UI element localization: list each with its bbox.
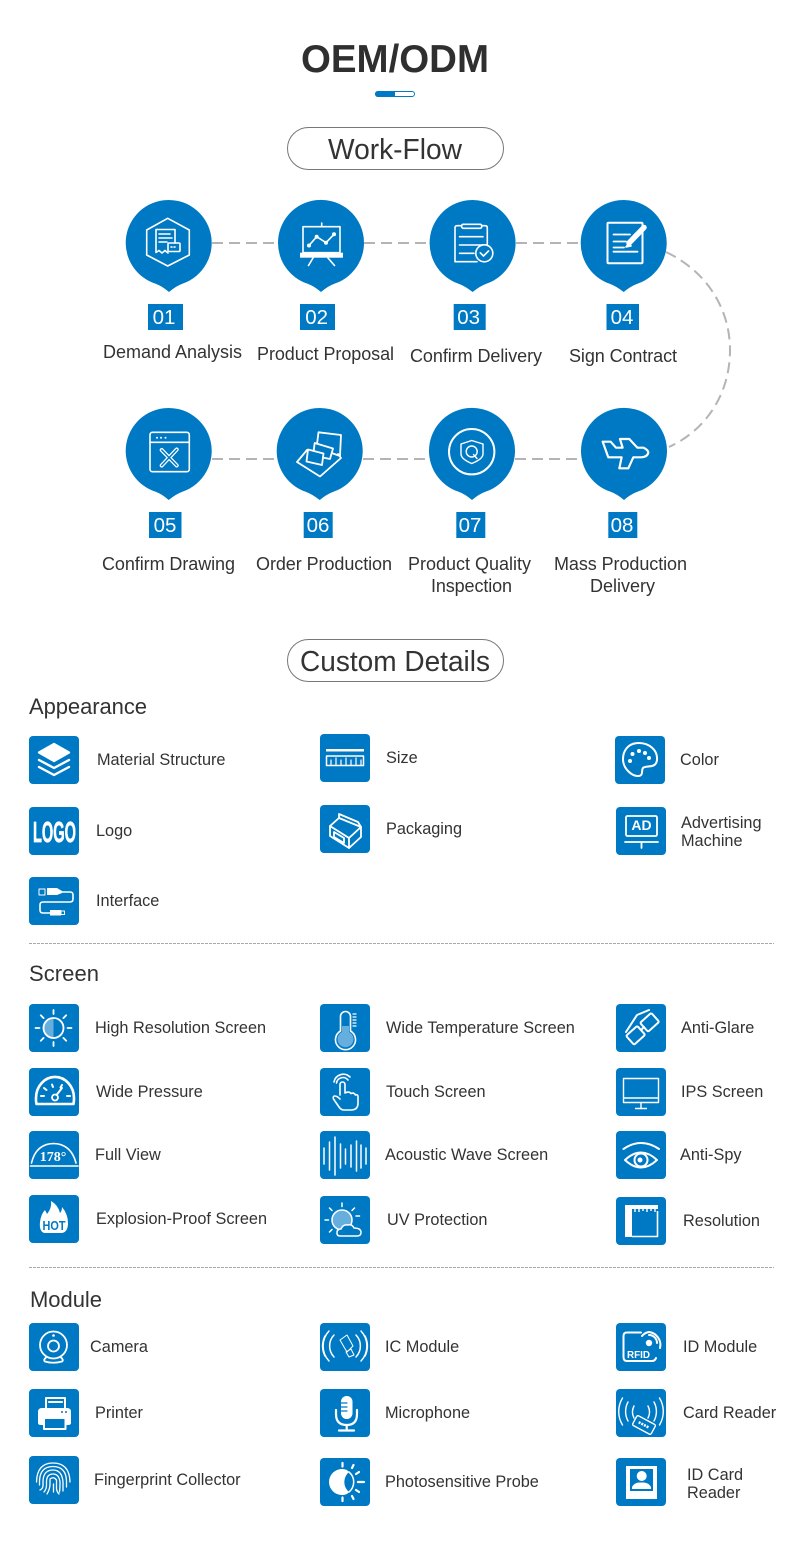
item: Anti-Spy: Anti-Spy [680,1146,742,1164]
marker [277,408,363,500]
label: Inspection [431,576,512,596]
icon: AD screen [625,816,658,848]
item: High Resolution Screen [29,1004,266,1052]
item: Packaging: Packaging [386,820,462,838]
icon: requirements document [147,218,189,266]
item: IPS Screen: IPS Screen [681,1083,763,1101]
item: ID Module: ID Module [683,1338,757,1356]
panel: workflow step 04 [569,200,677,366]
icon: contract with pen [608,223,644,263]
item: Acoustic Wave Screen: Acoustic Wave Screen [385,1146,548,1164]
item: IC Module: IC Module [385,1338,459,1356]
item: High Resolution Screen: High Resolution Screen [95,1019,266,1037]
panel: workflow step 02: 02 [305,306,328,329]
icon: monitor [624,1078,658,1108]
icon: palette [623,743,657,776]
number [149,512,182,538]
title underline bar [375,91,414,97]
marker [278,200,364,292]
icon: touch hand [333,1074,358,1110]
label: Product Proposal [257,344,394,364]
number [608,512,637,538]
item: Color: Color [680,751,719,769]
icon: hot flame [40,1201,68,1233]
item: Packaging [320,805,462,853]
item: Fingerprint Collector: Fingerprint Collector [94,1471,241,1489]
heading: Custom Details [288,640,504,682]
marker [126,408,212,500]
panel: workflow step 08: 08 [611,514,633,537]
item: Microphone: Microphone [385,1404,470,1422]
number [148,304,183,330]
icon: eye [624,1143,659,1168]
item: ID Card Reader: ID Card [687,1466,743,1484]
item: Acoustic Wave Screen [320,1131,548,1179]
panel: workflow step 06 [256,408,392,574]
item: ID Module [616,1323,757,1371]
item: Explosion-Proof Screen: Explosion-Proof Screen [96,1210,267,1228]
number [456,512,485,538]
item: Microphone [320,1389,470,1437]
icon: contactless card [323,1331,367,1361]
number [454,304,486,330]
marker [581,200,667,292]
icon: microphone [336,1396,357,1430]
item: Anti-Glare: Anti-Glare [681,1019,754,1037]
panel: workflow step 07 [408,408,531,596]
item: Touch Screen [320,1068,486,1116]
panel: workflow step 03: 03 [457,306,480,329]
marker [126,200,212,292]
item: Wide Temperature Screen [320,1004,575,1052]
icon: light and dark sun [329,1463,364,1501]
item: Touch Screen: Touch Screen [386,1083,486,1101]
panel: workflow step 04: 04 [611,306,633,329]
panel: workflow step 02 [257,200,394,364]
icon: RFID card: RFID [627,1349,650,1361]
panel: workflow step 05 [102,408,235,574]
icon: sun and cloud [325,1203,361,1236]
item: Advertising Machine: Advertising [681,814,762,832]
icon: ID photo [626,1466,657,1499]
item: Interface: Interface [96,892,159,910]
icon: production sheets [297,432,341,476]
label: Confirm Drawing [102,554,235,574]
label [554,554,687,596]
item: Advertising Machine [616,807,762,855]
item: Size [320,734,418,782]
item: Card Reader: Card Reader [683,1404,777,1422]
item: Logo: Logo [96,822,132,840]
marker [429,408,515,500]
label: Demand Analysis [103,342,242,362]
icon: box [330,814,361,848]
label: Confirm Delivery [410,346,542,366]
panel: workflow step 03 [410,200,542,366]
heading: Screen: Screen [29,961,99,986]
item: IC Module [320,1323,459,1371]
item: Full View [29,1131,161,1179]
icon: card reader waves [619,1398,663,1435]
item: Fingerprint Collector [29,1456,241,1504]
label: Order Production [256,554,392,574]
label [408,554,531,596]
heading: Work-Flow [288,128,504,170]
number [304,512,333,538]
heading: Custom Details: Custom Details [300,646,490,678]
icon: logo lettering: LOGO [33,817,76,849]
item: Material Structure: Material Structure [97,751,226,769]
item: Anti-Spy [616,1131,742,1179]
icon: ruler [326,749,364,766]
icon: layers [39,744,69,775]
icon: fingerprint [36,1463,70,1494]
item: Wide Temperature Screen: Wide Temperature Screen [386,1019,575,1037]
item: IPS Screen [616,1068,763,1116]
icon: pressure gauge [36,1077,74,1104]
item: UV Protection [320,1196,487,1244]
item: Logo [29,807,132,855]
item: Size: Size [386,749,418,767]
icon: drawing window [150,432,189,472]
item: Resolution: Resolution [683,1212,760,1230]
item: ID Card Reader [616,1458,743,1506]
item: Camera: Camera [90,1338,149,1356]
label: Mass Production [554,554,687,574]
icon: thermometer [336,1012,356,1050]
item: Material Structure [29,736,226,784]
label: Product Quality [408,554,531,574]
marker [430,200,516,292]
item: Printer: Printer [95,1404,144,1422]
icon: RFID card [624,1332,660,1361]
icon: clipboard with check [455,224,493,262]
item: UV Protection: UV Protection [387,1211,487,1229]
icon: sound wave [324,1137,366,1175]
icon: hot flame: HOT [42,1219,66,1233]
item: Printer [29,1389,144,1437]
item: Full View: Full View [95,1146,161,1164]
item: Card Reader [616,1389,777,1437]
panel: workflow step 06: 06 [307,514,329,537]
item: Photosensitive Probe [320,1458,539,1506]
number [606,304,639,330]
item: Advertising Machine: AD [631,817,652,833]
heading: Module: Module [30,1287,102,1312]
item: Wide Pressure: Wide Pressure [96,1083,203,1101]
item: ID Card Reader: Reader [687,1484,741,1502]
marker [581,408,667,500]
title: OEM/ODM [301,38,489,81]
icon: webcam [40,1332,67,1363]
icon: 178 degree view: 178° [40,1150,66,1165]
icon: half sun [36,1010,72,1046]
panel: workflow step 07: 07 [459,514,481,537]
icon: quality shield [449,429,494,474]
heading: Work-Flow: Work-Flow [328,134,462,166]
item: Anti-Glare [616,1004,754,1052]
number [300,304,335,330]
panel: workflow step 08 [554,408,687,596]
label: Sign Contract [569,346,677,366]
item: Wide Pressure [29,1068,203,1116]
icon: airplane [603,439,648,468]
item: Resolution [616,1197,760,1245]
icon: presentation board [300,223,343,266]
item: Explosion-Proof Screen [29,1195,267,1243]
item: Color [615,736,719,784]
panel: workflow step 05: 05 [154,514,176,537]
panel: workflow step 01: 01 [153,306,175,329]
icon: printer [38,1398,71,1429]
item: Camera [29,1323,149,1371]
icon: usb cable [39,888,73,916]
icon: ruler frame [625,1205,658,1237]
panel: workflow step 01 [103,200,242,362]
icon: glasses [626,1010,659,1045]
item: Interface [29,877,159,925]
heading: Appearance: Appearance [29,694,147,719]
item: Advertising Machine: Machine [681,832,743,850]
workflow connectors [212,243,730,459]
label: Delivery [590,576,655,596]
item: Photosensitive Probe: Photosensitive Probe [385,1473,539,1491]
